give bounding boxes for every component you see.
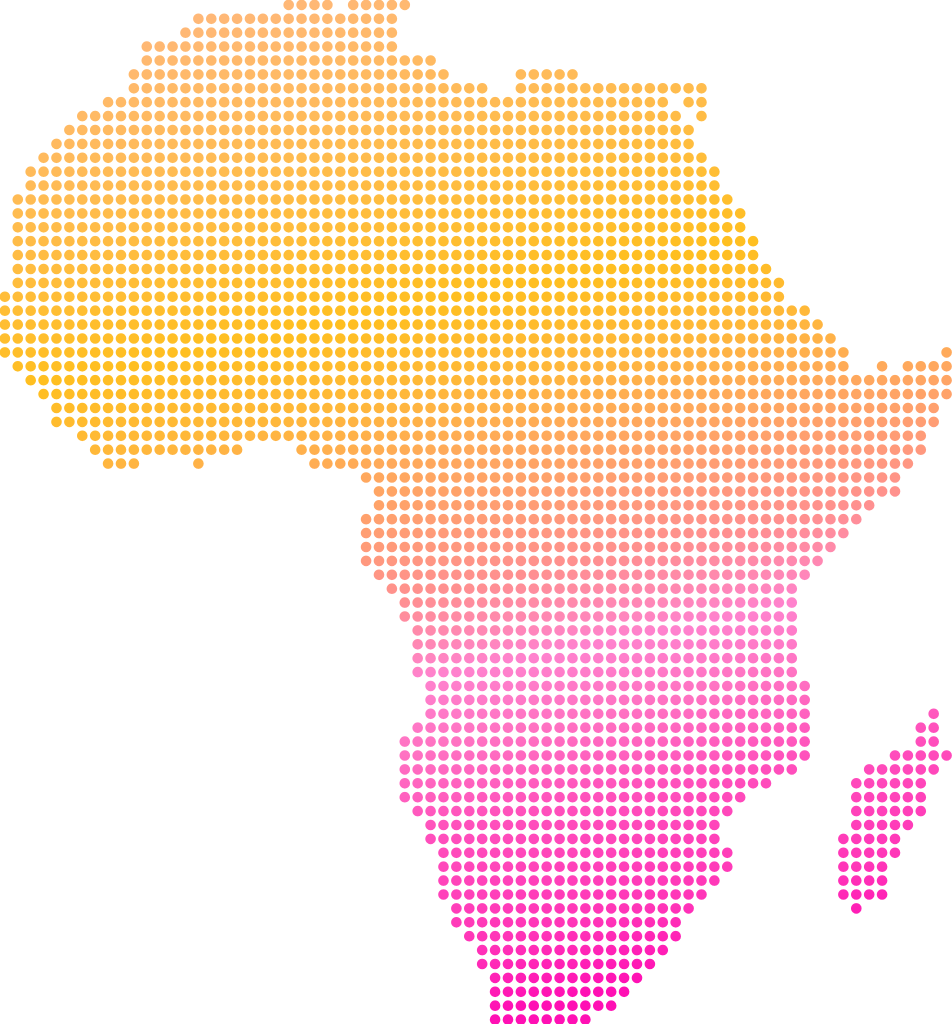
- Madagascar dots: [843, 714, 947, 908]
